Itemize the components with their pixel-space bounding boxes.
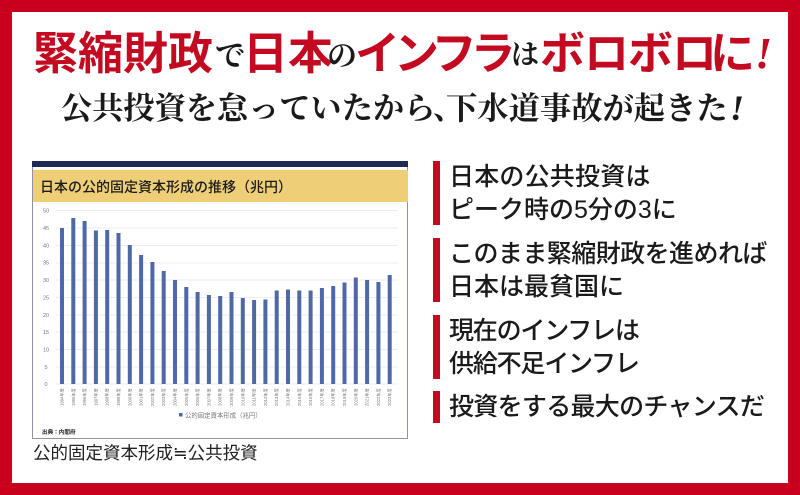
bar chart (43, 208, 398, 406)
subtitle: 公共投資を怠っていたから (61, 91, 435, 126)
bar chart: 2000年度 (126, 387, 133, 406)
bar chart: 2022年度 (375, 387, 382, 406)
point 2: このまま緊縮財政を進めれば (449, 240, 767, 268)
bar chart: 2015年度 (296, 387, 303, 406)
bar chart: 45 (43, 226, 49, 232)
bar chart: 2011年度 (251, 388, 258, 406)
point 2 (433, 238, 767, 302)
bar chart: 2014年度 (284, 387, 292, 406)
chart caption: 公的固定資本形成≒公共投資 (33, 440, 258, 465)
bar chart: 1994年度 (58, 387, 66, 406)
bar chart: 10 (43, 348, 49, 354)
bar chart: 2012年度 (262, 387, 269, 406)
bar chart: 20 (43, 313, 49, 319)
bar chart: 5 (44, 365, 48, 371)
bar chart: 2021年度 (364, 387, 371, 406)
bar chart: 2006年度 (194, 387, 201, 406)
title: 緊縮財政 (33, 28, 213, 79)
title: インフラ (355, 28, 510, 79)
bar chart: 15 (43, 330, 49, 336)
bar chart: 1998年度 (104, 387, 111, 406)
bar chart: 2019年度 (341, 387, 348, 406)
bar chart: 2010年度 (239, 387, 246, 406)
title: 日本 (243, 28, 333, 79)
point 2: 日本は最貧国に (449, 273, 624, 301)
bar chart: 25 (43, 296, 49, 302)
title: に (710, 28, 755, 79)
bar chart: 0 (44, 382, 48, 388)
chart source: 出典：内閣府 (42, 428, 76, 436)
title: ボロボロ (540, 28, 716, 79)
bar chart: 50 (43, 208, 49, 214)
bar chart: 2005年度 (183, 387, 190, 406)
point 1: ピーク時の5分の3に (449, 196, 677, 224)
bar chart: 1995年度 (70, 387, 77, 406)
bar chart: 35 (43, 260, 49, 266)
point 3: 供給不足インフレ (449, 350, 639, 378)
bar chart: 2013年度 (273, 387, 280, 406)
point 1 (433, 161, 677, 225)
point 1: 日本の公共投資は (449, 163, 651, 191)
panel: chart (32, 161, 408, 439)
bar chart: 2008年度 (217, 387, 224, 406)
title: は (511, 40, 539, 71)
bar chart: 40 (43, 244, 49, 250)
subtitle: 、 (433, 91, 464, 126)
subtitle: ! (730, 88, 744, 128)
bar chart: 1997年度 (92, 387, 99, 406)
bar chart: 2023年度 (386, 387, 393, 406)
bar chart: 2018年度 (330, 387, 337, 406)
title: ! (755, 29, 772, 78)
bar chart: 30 (43, 278, 49, 284)
bar chart: 2001年度 (138, 387, 145, 406)
bar chart: 2002年度 (149, 387, 156, 406)
bar chart: 1999年度 (115, 387, 122, 406)
point 3 (433, 315, 639, 379)
bar chart: 2016年度 (307, 387, 314, 406)
point 4: 投資をする最大のチャンスだ (449, 393, 764, 421)
point 3: 現在のインフレは (449, 317, 639, 345)
bar chart: 2020年度 (352, 387, 359, 406)
title (33, 28, 772, 79)
bar chart: 2007年度 (205, 387, 212, 406)
chart legend: 公的固定資本形成（兆円） (185, 410, 262, 420)
bar chart: 1996年度 (81, 387, 88, 406)
bar chart: 2003年度 (160, 387, 167, 406)
title: の (327, 40, 357, 73)
subtitle: 下水道事故が起きた (446, 91, 728, 126)
bar chart: 2017年度 (318, 387, 325, 406)
chart header band: 日本の公的固定資本形成の推移（兆円） (40, 179, 292, 195)
bar chart: 2009年度 (228, 387, 235, 406)
subtitle (61, 88, 744, 128)
chart header band (32, 161, 408, 202)
title: で (215, 40, 245, 73)
bar chart: 2004年度 (172, 387, 178, 406)
